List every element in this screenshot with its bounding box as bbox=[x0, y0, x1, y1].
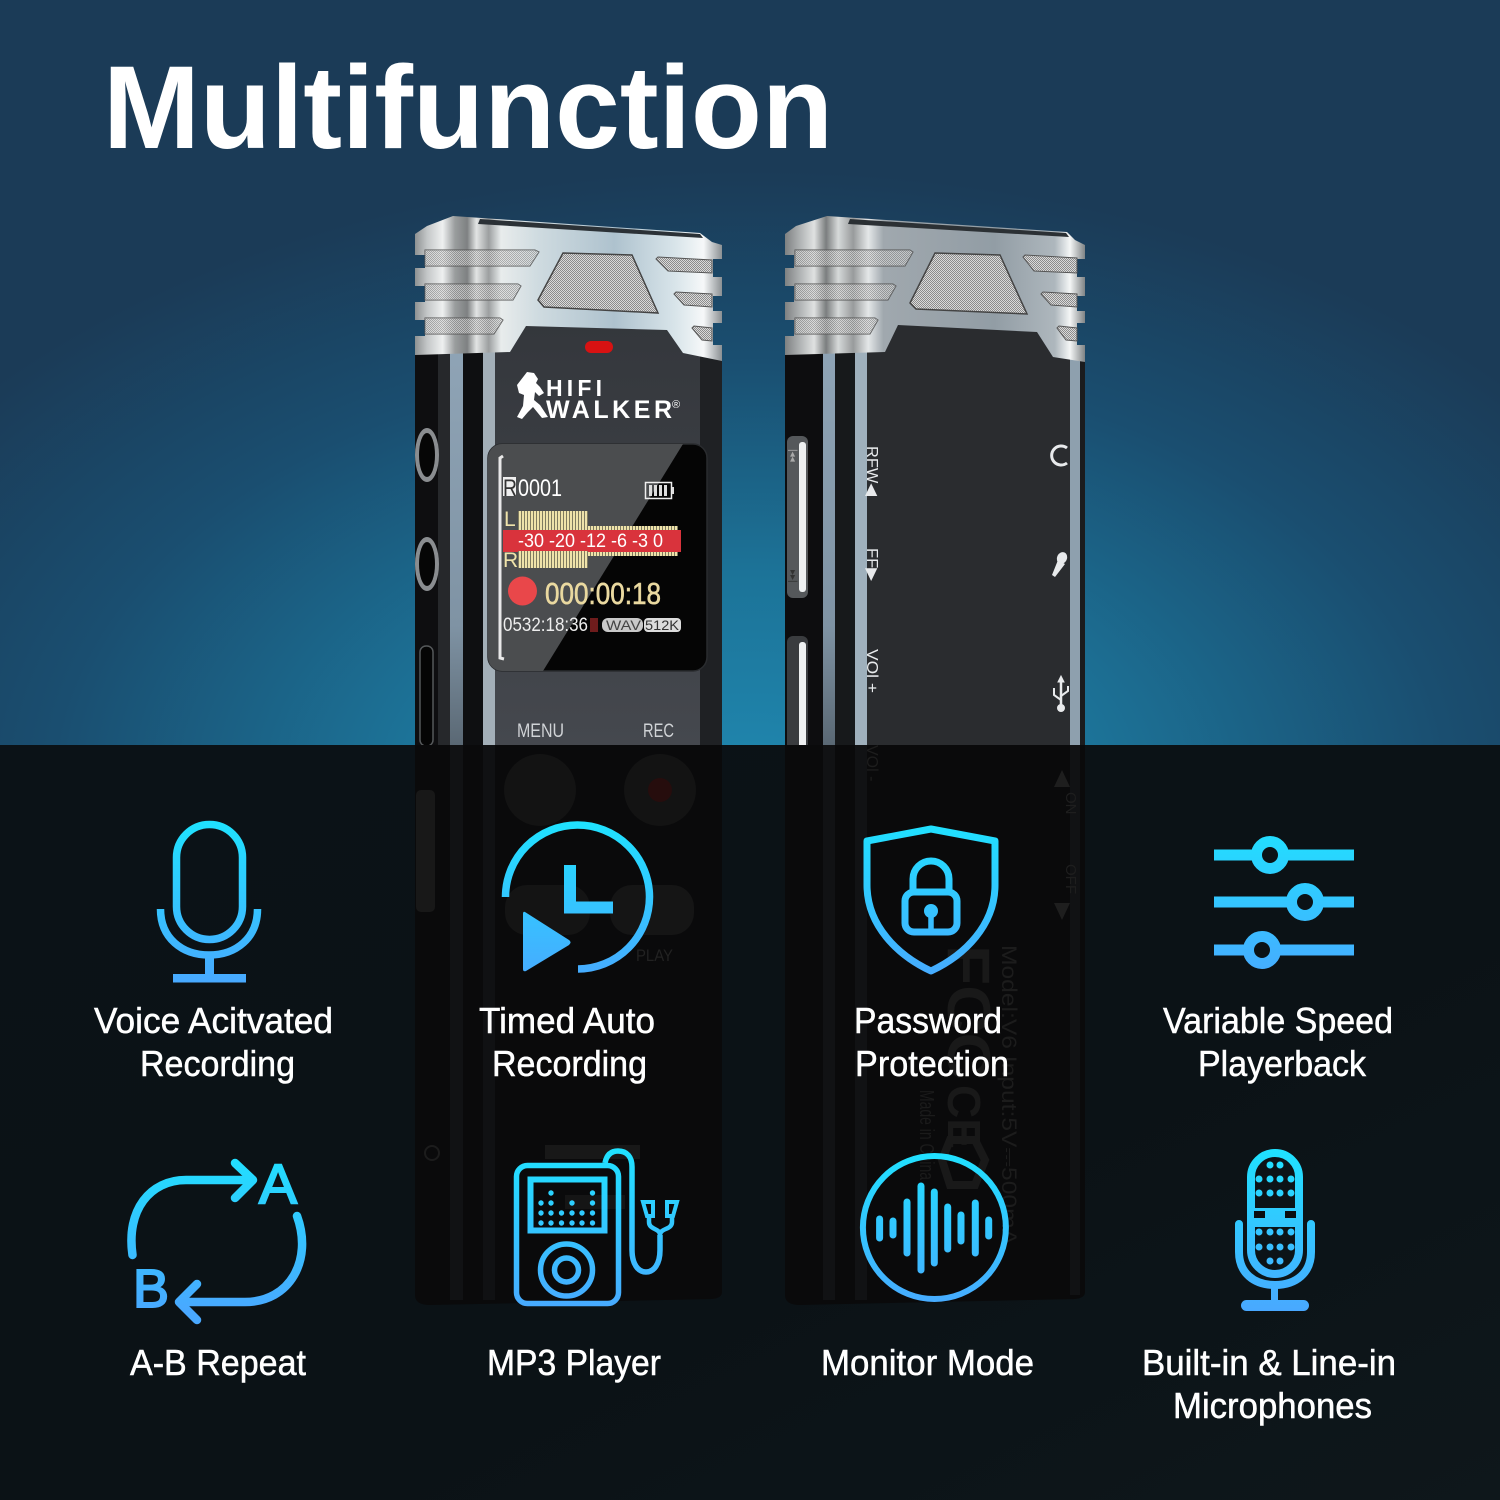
level meter R bbox=[503, 549, 678, 572]
ghost: recorder front behind panel bbox=[415, 745, 722, 1305]
feature: built-in and line-in microphones bbox=[1142, 1153, 1396, 1426]
button label MENU: MENU bbox=[517, 721, 564, 742]
screen bbox=[488, 444, 707, 671]
icon: clock with play bbox=[506, 825, 650, 971]
label: A-B Repeat bbox=[130, 1342, 306, 1383]
chrome top cap bbox=[785, 216, 1085, 362]
chrome top lip bbox=[478, 219, 703, 238]
icon: MP3 player with earphones bbox=[516, 1151, 677, 1304]
icon: microphone jack bbox=[1052, 550, 1069, 577]
icon: sound wave circle bbox=[863, 1156, 1006, 1299]
icon: A-B loop arrows bbox=[131, 1163, 302, 1320]
level meter L: L bbox=[504, 508, 516, 531]
feature: A-B repeat bbox=[130, 1152, 306, 1383]
background: dark lower panel bbox=[0, 745, 1500, 1500]
record dot bbox=[508, 576, 537, 606]
device: recorder back bbox=[785, 216, 1085, 752]
label: Protection bbox=[855, 1043, 1009, 1084]
ghost: recorder back behind panel: CE bbox=[938, 1085, 990, 1149]
feature: variable speed playback bbox=[1163, 842, 1393, 1084]
screen edge bar bbox=[500, 456, 504, 659]
label FF: FF▶ bbox=[863, 548, 880, 582]
icon: USB bbox=[1054, 676, 1068, 712]
label: Voice Acitvated bbox=[94, 1000, 333, 1041]
mesh highlight bbox=[795, 250, 913, 334]
file name: 0001 bbox=[518, 475, 562, 502]
speaker grille bbox=[538, 253, 658, 313]
file name: R bbox=[503, 475, 517, 502]
side button: skip bbox=[787, 436, 808, 598]
feature: MP3 player bbox=[487, 1151, 677, 1383]
ghost: recorder back behind panel: FCC bbox=[935, 945, 1002, 1080]
chrome top lip bbox=[848, 219, 1069, 237]
format badges bbox=[590, 617, 681, 633]
body side stripes bbox=[785, 345, 867, 746]
icon letter B: B bbox=[133, 1259, 169, 1319]
body face bbox=[867, 320, 1070, 746]
file name bbox=[503, 475, 562, 502]
format badges: 512K bbox=[645, 617, 680, 633]
feature: voice activated recording bbox=[94, 824, 333, 1084]
icon letter A: A bbox=[259, 1152, 298, 1215]
label VOL+: VOl + bbox=[863, 649, 880, 693]
label: Recording bbox=[492, 1043, 647, 1084]
mesh highlight bbox=[425, 250, 539, 334]
body right edge bbox=[1070, 345, 1085, 746]
background: blue upper panel bbox=[0, 0, 1500, 746]
label: Password bbox=[854, 1000, 1002, 1041]
label: Variable Speed bbox=[1163, 1000, 1393, 1041]
battery bbox=[646, 482, 674, 498]
left mesh slots bbox=[795, 250, 913, 334]
icon: player screen dots bbox=[538, 1190, 595, 1226]
label: Built-in & Line-in bbox=[1142, 1342, 1396, 1383]
level meter R: R bbox=[503, 549, 518, 572]
ghost: recorder front behind panel: PLAY bbox=[636, 946, 673, 965]
icon: hiker bbox=[517, 372, 548, 419]
icon: shield with lock bbox=[867, 829, 995, 971]
ghost: recorder back behind panel: ON bbox=[1062, 792, 1079, 814]
LED indicator bbox=[585, 341, 613, 353]
left mesh slots bbox=[425, 250, 539, 334]
right mesh slots bbox=[1023, 255, 1077, 341]
side button: skip: ▸▸| bbox=[787, 570, 798, 583]
icon: studio microphone bbox=[1239, 1153, 1311, 1311]
feature: monitor mode bbox=[821, 1156, 1034, 1383]
timer: 000:00:18 bbox=[545, 576, 661, 611]
label: Recording bbox=[140, 1043, 295, 1084]
level meter L bbox=[504, 508, 678, 531]
ports bbox=[415, 428, 439, 746]
brand: WALKER: WALKER bbox=[546, 396, 672, 424]
label: MP3 Player bbox=[487, 1342, 661, 1383]
icon: sliders bbox=[1214, 842, 1354, 964]
ghost: recorder back behind panel: VOl - bbox=[863, 745, 880, 781]
device: recorder front bbox=[415, 216, 722, 746]
brand: HIFI: HIFI bbox=[546, 375, 602, 401]
registered mark: ® bbox=[672, 399, 680, 411]
dB scale: -30 -20 -12 -6 -3 0 bbox=[518, 531, 663, 552]
ghost: recorder back behind panel bbox=[785, 745, 1085, 1305]
icon: headphone jack bbox=[1052, 446, 1067, 465]
format badges: WAV bbox=[606, 617, 642, 633]
body face bbox=[495, 320, 700, 746]
icon: microphone bbox=[160, 824, 258, 982]
label RFW: RFW◀ bbox=[863, 446, 880, 497]
ghost: recorder back behind panel: OFF bbox=[1062, 864, 1079, 894]
feature: password protection bbox=[854, 829, 1009, 1084]
side button: skip: |◂◂ bbox=[787, 449, 798, 462]
label: Timed Auto bbox=[479, 1000, 655, 1041]
body side stripes bbox=[415, 345, 495, 746]
brand logo bbox=[517, 372, 680, 424]
label: Playerback bbox=[1198, 1043, 1367, 1084]
feature: timed auto recording bbox=[479, 825, 655, 1084]
button label REC: REC bbox=[643, 721, 674, 742]
label: Microphones bbox=[1173, 1385, 1372, 1426]
remaining time: 0532:18:36 bbox=[503, 615, 588, 636]
body right edge bbox=[700, 345, 722, 746]
label: Monitor Mode bbox=[821, 1342, 1034, 1383]
title: Multifunction bbox=[103, 42, 833, 174]
ghost: recorder back behind panel: Model:V6 Input:5V⎓500mA bbox=[997, 945, 1020, 1245]
right mesh slots bbox=[656, 257, 712, 341]
chrome top cap bbox=[415, 216, 722, 361]
speaker grille bbox=[910, 253, 1027, 314]
side button: volume bbox=[787, 636, 808, 752]
ghost: recorder back behind panel: Made in China bbox=[915, 1090, 937, 1181]
